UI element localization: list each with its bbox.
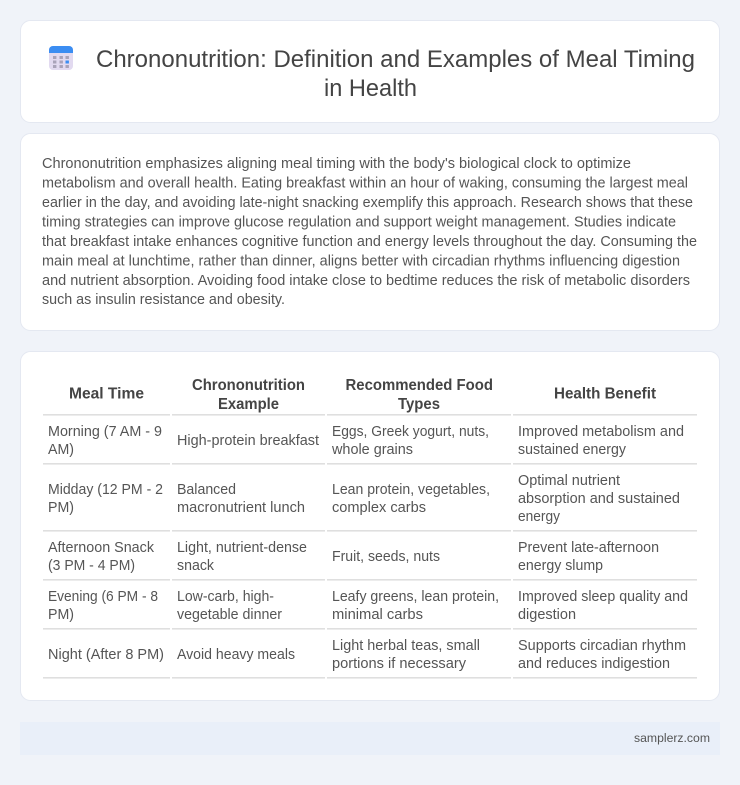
text block: summary paragraph: Chrononutrition emphasizes aligning meal timing with the body's biological clock to optimize xyxy=(42,156,631,172)
table row: midday: Midday (12 PM - 2 xyxy=(48,482,163,498)
table header row: Example xyxy=(218,396,279,413)
footer source text: samplerz.com xyxy=(634,731,710,745)
table row: morning: sustained energy xyxy=(518,442,627,458)
table row: midday: Lean protein, vegetables, xyxy=(332,482,490,498)
icon: calendar xyxy=(49,46,73,70)
table row: night: Light herbal teas, small xyxy=(332,638,480,654)
table row: morning xyxy=(48,424,684,458)
table header row: Recommended Food xyxy=(346,377,493,394)
text block: summary paragraph: metabolism and overall health. Eating breakfast within an hour of waking, consuming the largest meal xyxy=(42,176,688,192)
table header row: Meal Time xyxy=(69,386,144,402)
table row: evening: Low-carb, high- xyxy=(177,589,274,605)
table header row: Health Benefit xyxy=(554,386,656,402)
table row: night: and reduces indigestion xyxy=(518,656,670,672)
table row: afternoon snack: Prevent late-afternoon xyxy=(518,540,659,556)
panel: title card xyxy=(20,20,720,122)
table row: morning: Eggs, Greek yogurt, nuts, xyxy=(332,424,489,440)
table row: midday: complex carbs xyxy=(332,500,426,516)
table row: evening: minimal carbs xyxy=(332,607,423,623)
table row: morning: High-protein breakfast xyxy=(177,433,319,449)
table row: afternoon snack: Afternoon Snack xyxy=(48,540,155,556)
table row: midday: absorption and sustained xyxy=(518,491,680,507)
table row: midday: energy xyxy=(518,509,561,525)
table row: evening: Leafy greens, lean protein, xyxy=(332,589,499,605)
table row: evening: Evening (6 PM - 8 xyxy=(48,589,158,605)
table row: evening: digestion xyxy=(518,607,576,623)
table row: night: Avoid heavy meals xyxy=(177,647,295,663)
table row: evening: PM) xyxy=(48,607,74,623)
table row: midday: PM) xyxy=(48,500,74,516)
title xyxy=(96,46,695,102)
table row: morning: AM) xyxy=(48,442,74,458)
table row: midday: Balanced xyxy=(177,482,236,498)
panel: meal timing table xyxy=(20,352,720,700)
table row: midday: Optimal nutrient xyxy=(518,473,620,489)
table row: morning: whole grains xyxy=(331,442,413,458)
table row: night: Supports circadian rhythm xyxy=(518,638,686,654)
table row: evening xyxy=(48,589,688,623)
table row: midday: macronutrient lunch xyxy=(177,500,305,516)
table row: night xyxy=(48,638,686,672)
text block: summary paragraph: such as insulin resistance and obesity. xyxy=(42,292,285,308)
table row: afternoon snack: Fruit, seeds, nuts xyxy=(332,549,440,565)
title: Chrononutrition: Definition and Examples of Meal Timing xyxy=(96,46,695,73)
table header row xyxy=(69,377,656,413)
table row: afternoon snack: energy slump xyxy=(518,558,603,574)
text block: summary paragraph xyxy=(42,156,697,308)
table row: night: Night (After 8 PM) xyxy=(48,647,164,663)
table header row: Chrononutrition xyxy=(192,377,305,394)
table row: morning: Improved metabolism and xyxy=(518,424,684,440)
table row: night: portions if necessary xyxy=(332,656,467,672)
footer bar xyxy=(20,722,720,755)
panel: summary text xyxy=(20,134,720,330)
text block: summary paragraph: that breakfast intake enhances cognitive function and energy levels throughout the day. Consuming the xyxy=(42,234,697,250)
table row: evening: Improved sleep quality and xyxy=(518,589,688,605)
table header row: Types xyxy=(398,396,440,413)
text block: summary paragraph: main meal at lunchtime, rather than dinner, aligns better with circadian rhythms influencing digestion xyxy=(42,254,680,270)
table row: midday xyxy=(48,473,680,525)
table row: afternoon snack: snack xyxy=(177,558,215,574)
text block: summary paragraph: and nutrient absorption. Avoiding food intake close to bedtime reduces the risk of metabolic disorders xyxy=(42,273,690,289)
table row: afternoon snack xyxy=(48,540,659,574)
table row: afternoon snack: (3 PM - 4 PM) xyxy=(48,558,135,574)
text block: summary paragraph: earlier in the day, and avoiding late-night snacking exemplify this approach. Research shows that these xyxy=(42,195,693,211)
table row: morning: Morning (7 AM - 9 xyxy=(48,424,162,440)
table row: afternoon snack: Light, nutrient-dense xyxy=(177,540,307,556)
text block: summary paragraph: timing strategies can improve glucose regulation and support weight management. Studies indicate xyxy=(42,214,676,230)
title: in Health xyxy=(324,75,417,102)
table row: evening: vegetable dinner xyxy=(177,607,282,623)
